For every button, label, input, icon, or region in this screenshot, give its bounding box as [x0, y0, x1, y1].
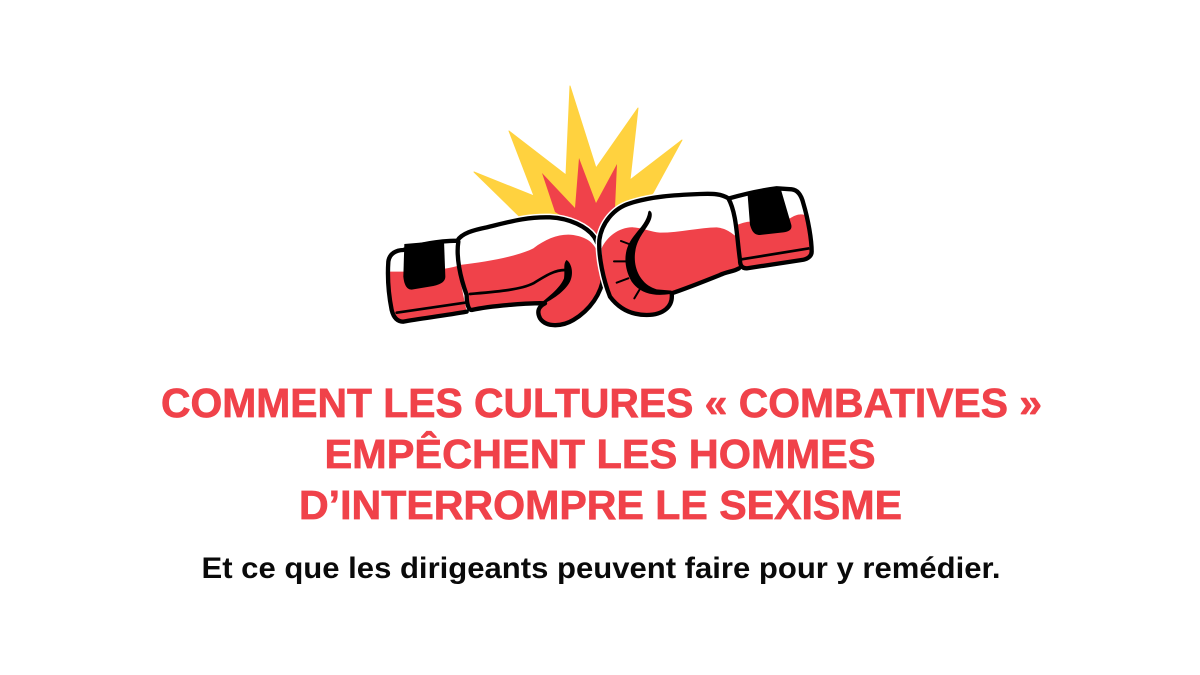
title line 1: COMMENT LES CULTURES « COMBATIVES »	[161, 380, 1042, 426]
title line 3: D’INTERROMPRE LE SEXISME	[299, 482, 902, 528]
title line 2: EMPÊCHENT LES HOMMES	[324, 431, 876, 477]
icon: yellow explosion burst	[474, 86, 682, 240]
icon: left boxing glove	[388, 217, 603, 325]
subtitle: Et ce que les dirigeants peuvent faire pour y remédier.	[202, 552, 1001, 585]
illustration: boxing gloves colliding	[388, 86, 812, 325]
title	[161, 380, 1042, 528]
icon: right boxing glove	[599, 188, 812, 315]
icon: red explosion core	[542, 158, 617, 238]
